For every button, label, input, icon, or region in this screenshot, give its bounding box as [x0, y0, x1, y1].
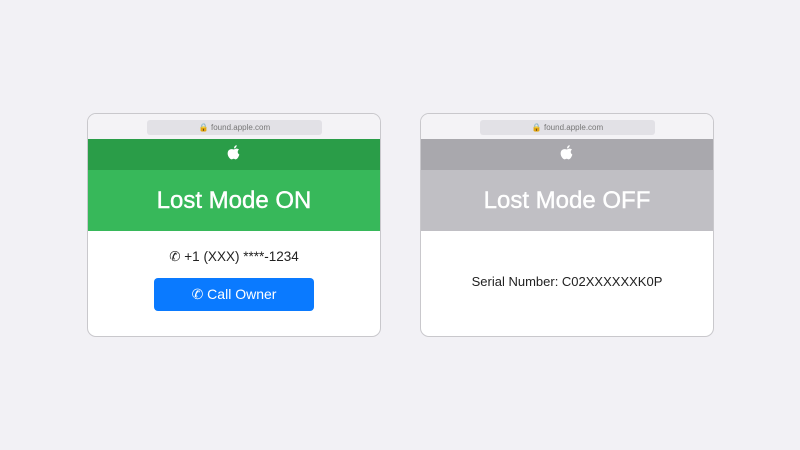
heading: Lost Mode OFF [484, 187, 650, 214]
icon: apple logo [421, 139, 713, 170]
card: lost mode on [87, 113, 381, 337]
card: lost mode off [420, 113, 714, 337]
button: call owner: ✆ Call Owner [192, 286, 276, 302]
icon: apple logo [88, 139, 380, 170]
browser bar: 🔒 found.apple.com [532, 123, 603, 132]
heading: Lost Mode ON [157, 187, 311, 214]
heading [421, 170, 713, 231]
browser bar [421, 114, 713, 139]
button: call owner [154, 278, 314, 311]
browser bar: 🔒 found.apple.com [199, 123, 270, 132]
serial number: Serial Number: C02XXXXXXK0P [472, 274, 662, 289]
browser bar [88, 114, 380, 139]
phone number: ✆ +1 (XXX) ****-1234 [169, 249, 299, 264]
heading [88, 170, 380, 231]
